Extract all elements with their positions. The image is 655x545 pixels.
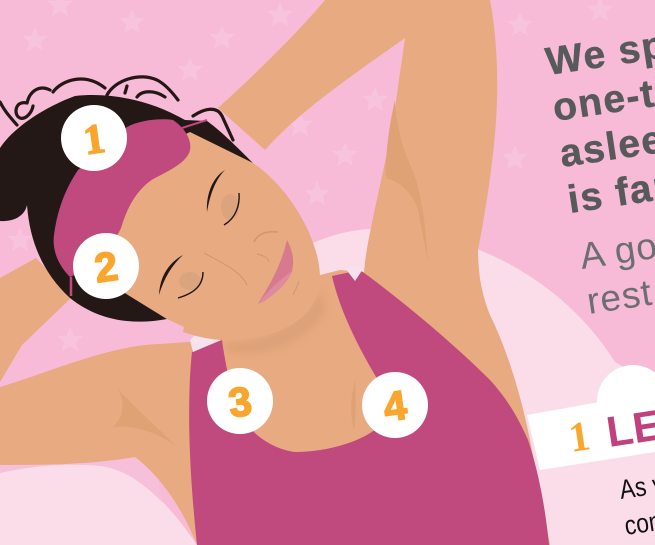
subheading: rest	[584, 272, 655, 322]
number marker 2	[73, 233, 139, 299]
shoulder folds	[190, 266, 365, 352]
tank top	[189, 270, 549, 545]
armpit shading	[113, 100, 428, 445]
banner: point 1	[527, 365, 655, 470]
body text: point 1	[617, 465, 655, 541]
face	[105, 132, 320, 340]
sleep mask	[54, 119, 207, 296]
chin shadow	[225, 290, 326, 353]
number marker 4: 4	[381, 382, 410, 430]
subheading	[577, 218, 655, 322]
number marker 4	[362, 372, 428, 438]
number marker 3: 3	[226, 378, 255, 426]
number marker 1: 1	[81, 116, 108, 164]
facial features	[159, 170, 299, 304]
number marker 3	[207, 368, 273, 434]
hair	[0, 77, 253, 322]
banner: point 1: 1	[566, 413, 593, 462]
heading	[543, 12, 655, 222]
number marker 2: 2	[92, 243, 121, 291]
number marker 1	[61, 105, 127, 171]
pillow	[0, 229, 655, 545]
